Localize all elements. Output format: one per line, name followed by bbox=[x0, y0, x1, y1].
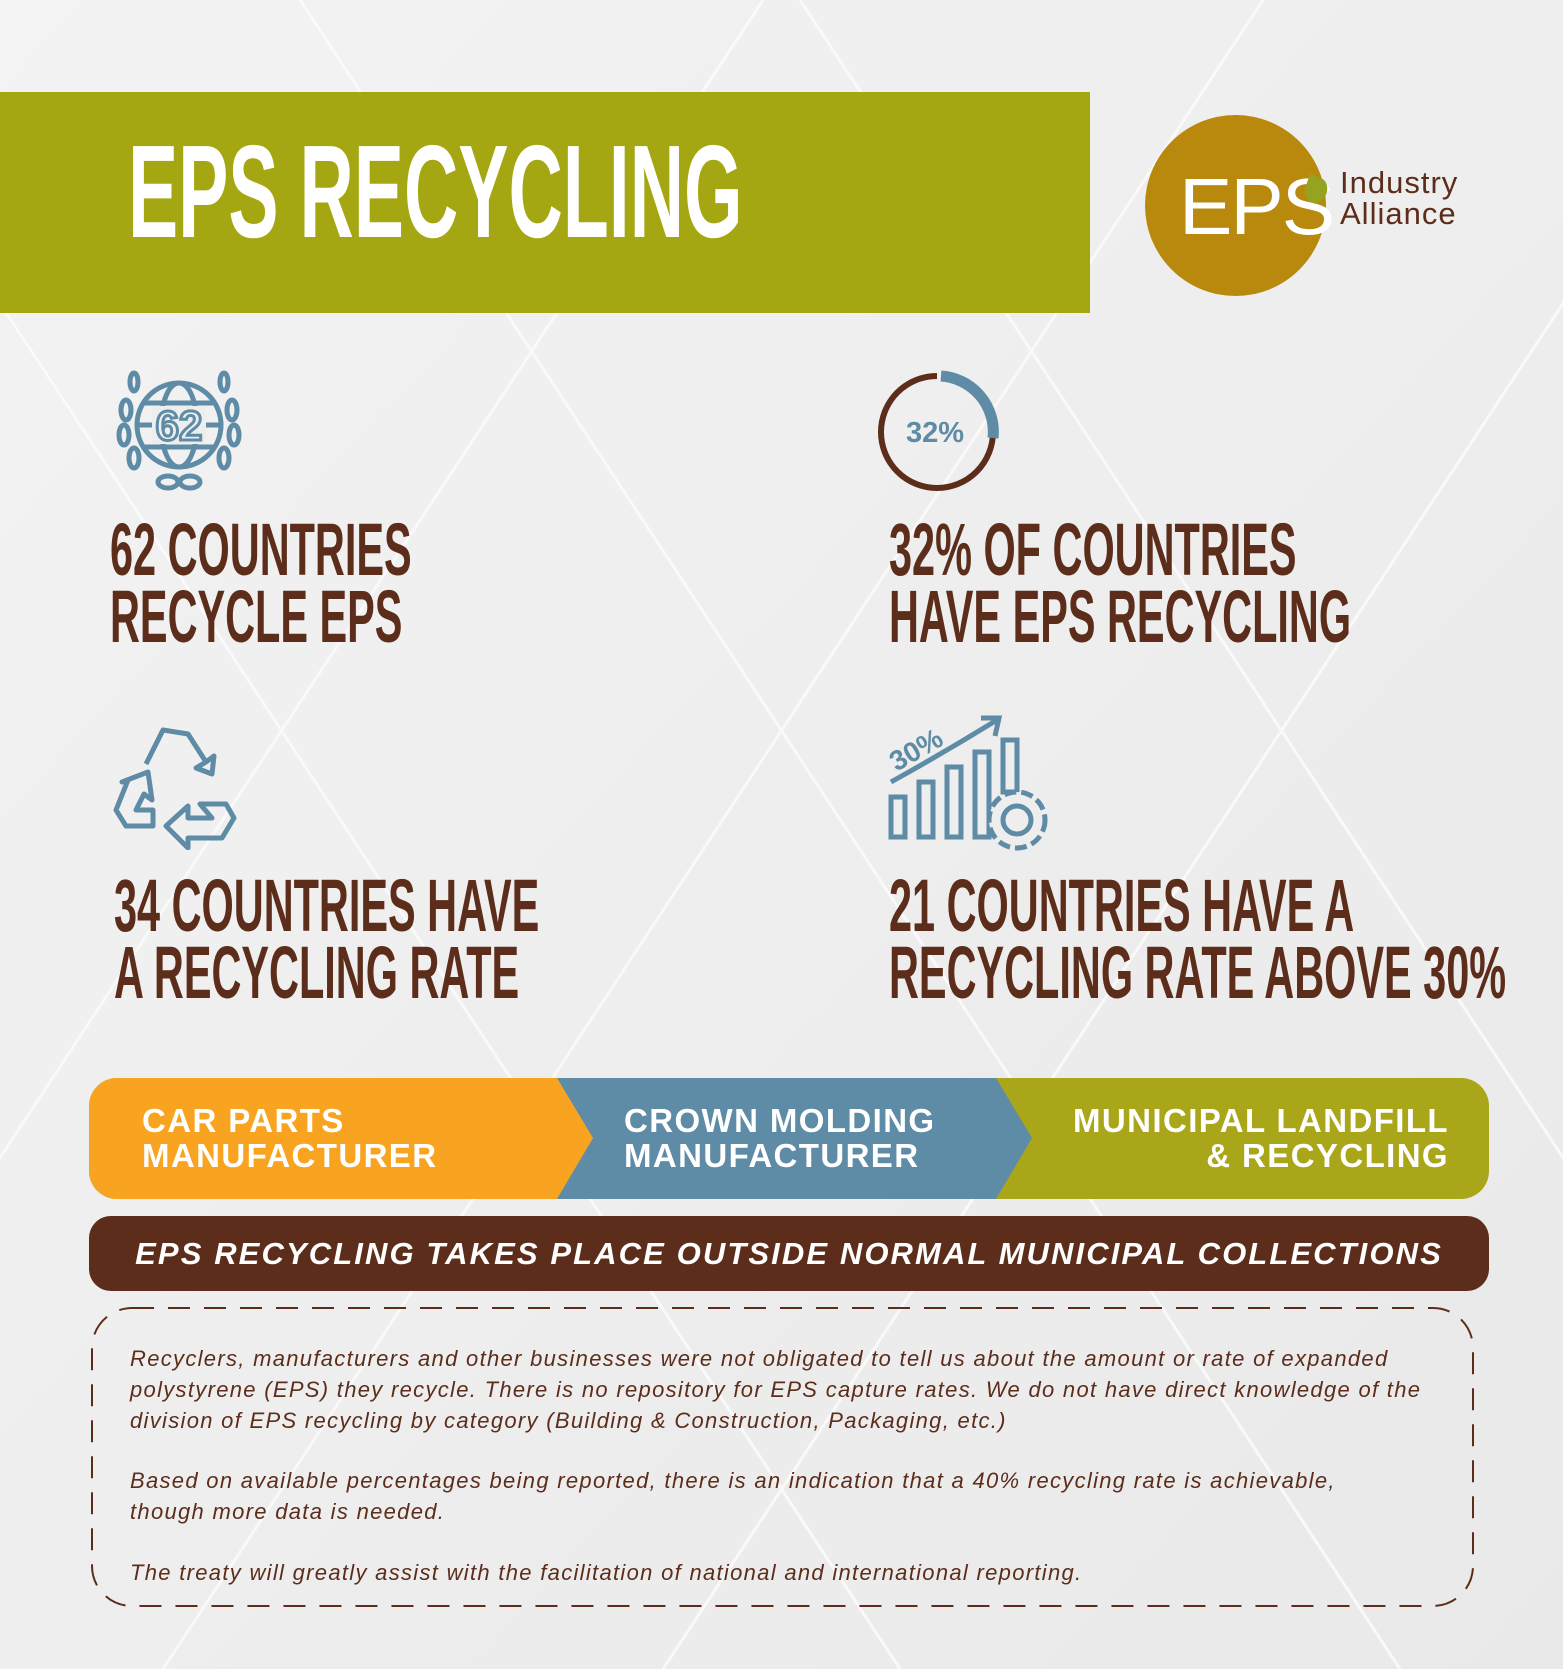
stat: 34 countries bbox=[114, 728, 539, 1014]
text: RECYCLE EPS bbox=[110, 575, 402, 658]
text: RECYCLING RATE ABOVE 30% bbox=[889, 931, 1506, 1014]
text bbox=[110, 508, 412, 658]
stat: 21 countries bbox=[885, 716, 1506, 1014]
step: crown molding: MANUFACTURER bbox=[624, 1137, 919, 1174]
text bbox=[114, 864, 539, 1014]
logo bbox=[1145, 115, 1458, 296]
step: municipal bbox=[1073, 1102, 1449, 1174]
logo: Industry bbox=[1340, 165, 1458, 200]
notes paragraph 2: though more data is needed. bbox=[130, 1499, 445, 1524]
stat: 62 countries bbox=[110, 370, 412, 658]
stat: 32% bbox=[878, 370, 1351, 658]
notes paragraph 3: The treaty will greatly assist with the facilitation of national and international reporting. bbox=[130, 1560, 1082, 1585]
step: municipal: MUNICIPAL LANDFILL bbox=[1073, 1102, 1449, 1139]
text: 62 COUNTRIES bbox=[110, 508, 412, 591]
text: HAVE EPS RECYCLING bbox=[889, 575, 1351, 658]
step: municipal: & RECYCLING bbox=[1206, 1137, 1449, 1174]
icon: leaf bbox=[1301, 174, 1331, 206]
icon: donut 32%: 32% bbox=[906, 417, 964, 449]
logo: EPS bbox=[1179, 162, 1333, 251]
process ribbon bbox=[89, 1078, 1489, 1199]
icon: recycle bbox=[114, 728, 236, 850]
notes paragraph 1: division of EPS recycling by category (Building & Construction, Packaging, etc.) bbox=[130, 1408, 1007, 1433]
step: car parts: CAR PARTS bbox=[142, 1102, 345, 1139]
banner: outside municipal collections: EPS RECYCLING TAKES PLACE OUTSIDE NORMAL MUNICIPAL COLLECTIONS bbox=[135, 1236, 1443, 1271]
notes paragraph 2 bbox=[130, 1468, 1336, 1524]
icon: globe laurel: 62 bbox=[156, 402, 202, 449]
notes paragraph 2: Based on available percentages being reported, there is an indication that a 40% recycling rate is achievable, bbox=[130, 1468, 1336, 1493]
step: car parts bbox=[142, 1102, 437, 1174]
text: 21 COUNTRIES HAVE A bbox=[889, 864, 1354, 947]
step: car parts: MANUFACTURER bbox=[142, 1137, 437, 1174]
text: 34 COUNTRIES HAVE bbox=[114, 864, 539, 947]
notes paragraph 1: Recyclers, manufacturers and other businesses were not obligated to tell us about the amount or rate of expanded bbox=[130, 1346, 1388, 1371]
icon: donut 32% bbox=[878, 370, 999, 491]
icon: chart gear bbox=[885, 716, 1048, 850]
icon: chart gear: 30% bbox=[885, 722, 948, 777]
title: EPS RECYCLING bbox=[128, 118, 743, 265]
notes box bbox=[91, 1307, 1474, 1607]
notes paragraph 1: polystyrene (EPS) they recycle. There is no repository for EPS capture rates. We do not have direct knowledge of the bbox=[130, 1377, 1421, 1402]
logo: Alliance bbox=[1340, 196, 1457, 231]
title banner bbox=[0, 92, 1090, 313]
icon: globe laurel bbox=[116, 370, 242, 490]
text bbox=[889, 508, 1351, 658]
notes paragraph 1 bbox=[130, 1346, 1421, 1433]
text bbox=[889, 864, 1506, 1014]
text: 32% OF COUNTRIES bbox=[889, 508, 1297, 591]
text: A RECYCLING RATE bbox=[114, 931, 519, 1014]
step: crown molding: CROWN MOLDING bbox=[624, 1102, 936, 1139]
banner: outside municipal collections bbox=[89, 1216, 1489, 1291]
step: crown molding bbox=[624, 1102, 936, 1174]
